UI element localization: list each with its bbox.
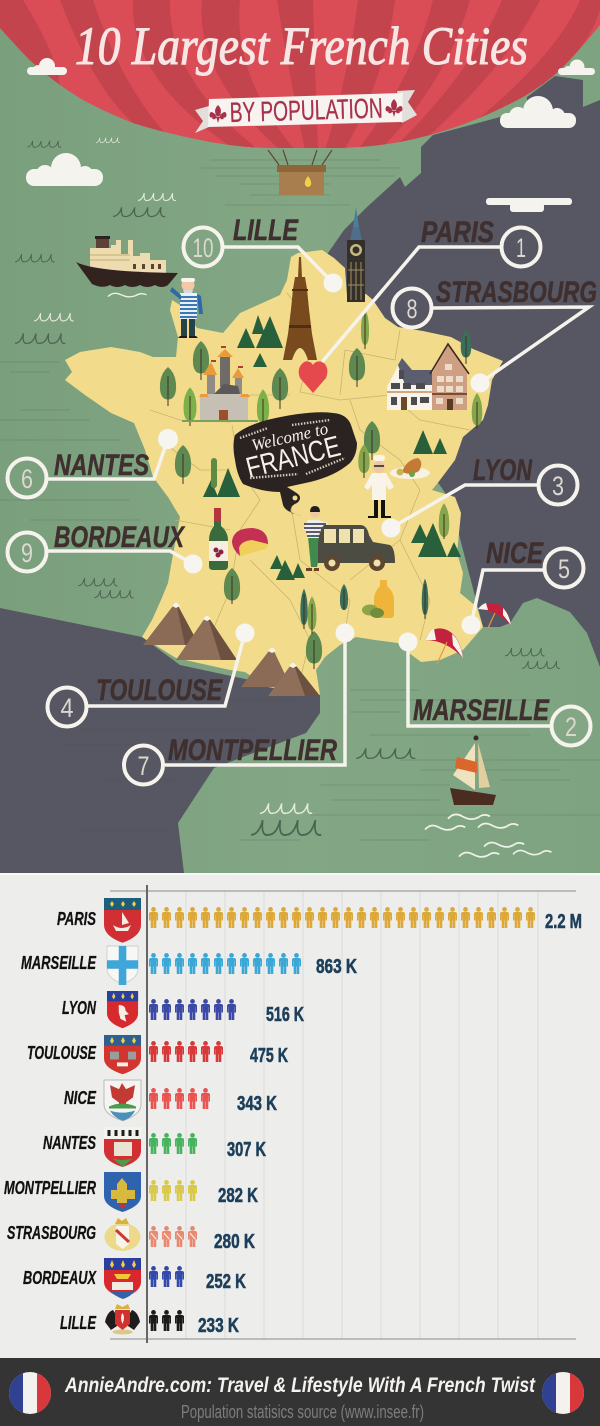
icon: steam ship bbox=[76, 236, 178, 287]
bar row: Marseille: 863 K bbox=[316, 956, 357, 978]
bar row: Nice bbox=[64, 1080, 277, 1121]
icon: man in striped shirt bbox=[303, 506, 328, 571]
city label: Marseille bbox=[413, 694, 590, 746]
shield: Lyon bbox=[107, 991, 138, 1028]
city label: Nantes: 6 bbox=[21, 464, 33, 494]
connector: Lille bbox=[224, 247, 342, 292]
city label: Paris bbox=[421, 216, 540, 266]
icon: cheese wheel bbox=[232, 528, 268, 556]
shield: Strasbourg bbox=[104, 1218, 140, 1251]
hot air balloon envelope bbox=[0, 0, 600, 155]
icon: sailboat bbox=[450, 736, 496, 805]
bar row: Bordeaux: 252 K bbox=[206, 1271, 246, 1293]
city label: Lille: LILLE bbox=[233, 214, 299, 247]
bar row: Nantes bbox=[43, 1127, 266, 1167]
speech bubble: Welcome to France bbox=[234, 412, 357, 516]
bar row: Lille: 233 K bbox=[198, 1315, 239, 1337]
bar row: Montpellier: 282 K bbox=[218, 1185, 258, 1207]
icon: Eiffel tower bbox=[283, 257, 317, 360]
bar row: Montpellier: MONTPELLIER bbox=[4, 1178, 96, 1198]
white sea waves bbox=[108, 293, 552, 857]
city label: Toulouse bbox=[48, 674, 223, 726]
title: 10 Largest French Cities bbox=[75, 16, 528, 76]
city label: Nice: NICE bbox=[486, 537, 544, 570]
bar row: Nice: NICE bbox=[64, 1088, 97, 1108]
icon: mountains bbox=[143, 602, 320, 696]
icon: half-timbered houses bbox=[387, 344, 469, 410]
bar row: Strasbourg: 280 K bbox=[214, 1231, 255, 1253]
bar row: Montpellier bbox=[4, 1172, 258, 1212]
city label: Toulouse: TOULOUSE bbox=[96, 674, 223, 707]
bar row: Bordeaux bbox=[23, 1258, 246, 1299]
bar row: Lille: LILLE bbox=[60, 1313, 97, 1333]
bar row: Lyon: LYON bbox=[62, 998, 97, 1018]
city label: Bordeaux bbox=[8, 521, 186, 572]
bar row: Toulouse bbox=[27, 1035, 288, 1074]
bar row: Nantes: NANTES bbox=[43, 1133, 96, 1153]
icon: belfry tower bbox=[347, 207, 365, 302]
connector: Montpellier bbox=[165, 624, 354, 765]
city label: Lyon bbox=[473, 454, 578, 504]
city label: Nantes: NANTES bbox=[54, 449, 149, 482]
subtitle ribbon: BY POPULATION bbox=[229, 92, 383, 128]
bar row: Nice: 343 K bbox=[237, 1093, 277, 1115]
bar row: Nantes: 307 K bbox=[227, 1139, 266, 1161]
shield: Marseille bbox=[107, 946, 138, 985]
city label: Paris: 1 bbox=[516, 233, 526, 263]
bar row: Paris: 2.2 M bbox=[545, 911, 582, 933]
bar row: Lyon: 516 K bbox=[266, 1004, 304, 1026]
shield: Nice bbox=[104, 1080, 141, 1121]
city label: Strasbourg bbox=[392, 276, 597, 328]
speech bubble: Welcome to France: FRANCE bbox=[243, 431, 344, 485]
shield: Nantes bbox=[104, 1127, 141, 1167]
bar row: Lyon bbox=[62, 991, 304, 1028]
connector: Lyon bbox=[382, 485, 537, 538]
city label: Toulouse: 4 bbox=[60, 693, 74, 723]
icon: chef and roast bbox=[364, 455, 430, 518]
icon: sailor bbox=[170, 278, 203, 338]
bar row: Bordeaux: BORDEAUX bbox=[23, 1268, 97, 1288]
icon: castle bbox=[182, 347, 258, 422]
icon: black car bbox=[318, 525, 395, 571]
icon: heart (Paris) bbox=[299, 361, 327, 393]
connector: Toulouse bbox=[88, 624, 254, 706]
map background: sea bbox=[0, 0, 600, 875]
bar row: Strasbourg: STRASBOURG bbox=[7, 1223, 96, 1243]
connector: Marseille bbox=[398, 632, 550, 726]
icons: trees bbox=[160, 309, 482, 669]
city label: Nice bbox=[486, 537, 584, 588]
panel: population chart background bbox=[0, 873, 600, 1358]
city label: Montpellier bbox=[124, 734, 337, 784]
icon: French flag left bbox=[9, 1372, 51, 1414]
city label: Strasbourg: 8 bbox=[406, 294, 418, 324]
subtitle ribbon bbox=[195, 90, 417, 133]
land mass: southwest dark region bbox=[0, 608, 320, 873]
bar row: Paris bbox=[57, 898, 582, 943]
city label: Lyon: LYON bbox=[473, 454, 533, 487]
city label: Lyon: 3 bbox=[552, 471, 564, 501]
water ripples bbox=[15, 138, 560, 835]
bar row: Strasbourg bbox=[7, 1218, 255, 1253]
footer band bbox=[0, 1358, 600, 1426]
icon: olive oil bbox=[362, 580, 394, 618]
city label: Lille: 10 bbox=[192, 233, 214, 263]
bar row: Lille bbox=[60, 1304, 239, 1337]
city label: Montpellier: MONTPELLIER bbox=[168, 734, 337, 767]
shield: Paris bbox=[104, 898, 141, 943]
icon: wine bottle bbox=[209, 508, 228, 570]
balloon basket bbox=[268, 150, 332, 195]
chart grid and axes bbox=[110, 885, 576, 1343]
footer source note: Population statisics source (www.insee.fr) bbox=[181, 1402, 424, 1422]
speech bubble: Welcome to France: Welcome to bbox=[250, 419, 330, 455]
shield: Montpellier bbox=[104, 1172, 141, 1212]
connector: Nice bbox=[462, 570, 543, 634]
sea texture lines bbox=[0, 160, 600, 840]
city label: Marseille: MARSEILLE bbox=[413, 694, 550, 727]
city label: Nice: 5 bbox=[558, 554, 570, 584]
bar row: Toulouse: TOULOUSE bbox=[27, 1043, 97, 1063]
city label: Paris: PARIS bbox=[421, 216, 494, 249]
city label: Lille bbox=[184, 214, 299, 266]
bar row: Marseille: MARSEILLE bbox=[21, 953, 97, 973]
connector: Nantes bbox=[48, 429, 178, 479]
connector: Bordeaux bbox=[48, 551, 202, 574]
connector: Paris bbox=[322, 247, 500, 362]
fleur-de-lis icons bbox=[210, 99, 402, 123]
bar row: Toulouse: 475 K bbox=[250, 1045, 288, 1067]
icons: pine groups bbox=[203, 315, 461, 580]
icon: French flag right bbox=[542, 1372, 584, 1414]
bar row: Marseille bbox=[21, 946, 357, 985]
city label: Nantes bbox=[8, 449, 149, 498]
connector: Strasbourg bbox=[433, 307, 589, 392]
city label: Bordeaux: BORDEAUX bbox=[54, 521, 186, 554]
shield: Toulouse bbox=[104, 1035, 141, 1074]
city label: Bordeaux: 9 bbox=[21, 538, 33, 568]
city label: Montpellier: 7 bbox=[138, 751, 150, 781]
land mass: northeast dark region bbox=[300, 76, 600, 667]
icon: beach umbrellas bbox=[425, 603, 511, 664]
map of France bbox=[65, 250, 503, 695]
shield: Lille bbox=[105, 1304, 140, 1334]
city label: Marseille: 2 bbox=[565, 712, 577, 742]
bar row: Paris: PARIS bbox=[57, 909, 96, 929]
shield: Bordeaux bbox=[104, 1258, 141, 1299]
clouds bbox=[26, 58, 595, 212]
